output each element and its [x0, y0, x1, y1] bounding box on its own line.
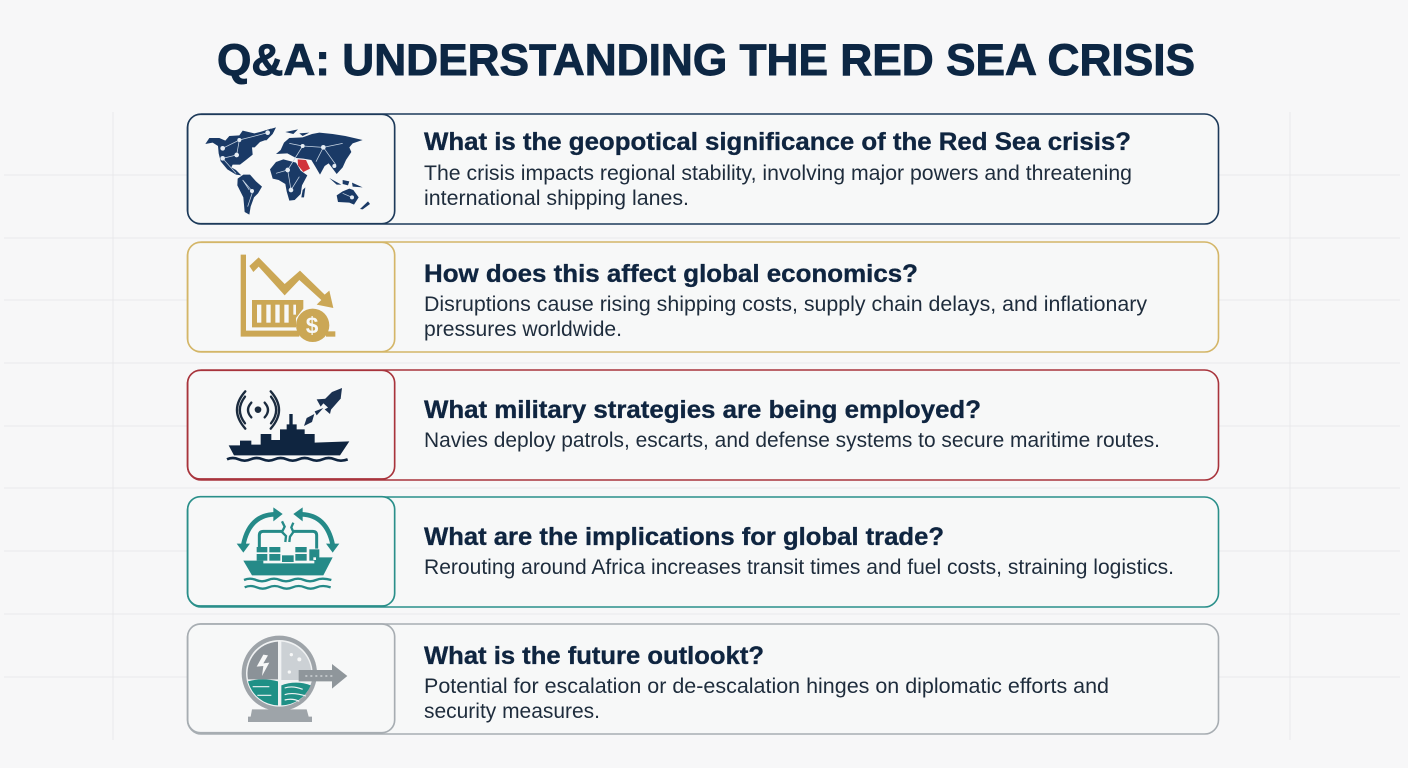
title: Q&A: UNDERSTANDING THE RED SEA CRISIS [217, 36, 1195, 85]
panel: future outlook: security measures. [424, 700, 600, 723]
panel: geopolitical significance [188, 114, 1218, 224]
icon: falling chart, container and dollar coin: $ [306, 312, 319, 338]
panel: global economics [188, 242, 1218, 352]
panel: geopolitical significance: international shipping lanes. [424, 187, 689, 210]
panel: global economics: pressures worldwide. [424, 318, 622, 341]
panel: future outlook [188, 624, 1218, 734]
icon: warship with radar signal and missile [188, 370, 395, 479]
question: What is the geopotical significance of the Red Sea crisis? [424, 128, 1131, 156]
panel: military strategies [188, 370, 1218, 480]
answer: Disruptions cause rising shipping costs, supply chain delays, and inflationary [424, 293, 1148, 316]
answer: Navies deploy patrols, escarts, and defense systems to secure maritime routes. [424, 429, 1160, 452]
panel: global trade [188, 497, 1218, 607]
question: How does this affect global economics? [424, 260, 918, 288]
answer: Potential for escalation or de-escalation hinges on diplomatic efforts and [424, 675, 1109, 698]
question: What are the implications for global trade? [424, 523, 944, 551]
icon: crystal ball with storm, calm seas and arrow [188, 624, 395, 733]
icon: world map with network and Red Sea highlight [188, 114, 395, 224]
icon: falling chart, container and dollar coin [188, 242, 395, 352]
answer: Rerouting around Africa increases transit times and fuel costs, straining logistics. [424, 556, 1174, 579]
icon: cargo ship with broken route arrows [188, 497, 395, 606]
answer: The crisis impacts regional stability, involving major powers and threatening [424, 162, 1132, 185]
question: What military strategies are being employed? [424, 396, 981, 424]
question: What is the future outlookt? [424, 642, 764, 670]
